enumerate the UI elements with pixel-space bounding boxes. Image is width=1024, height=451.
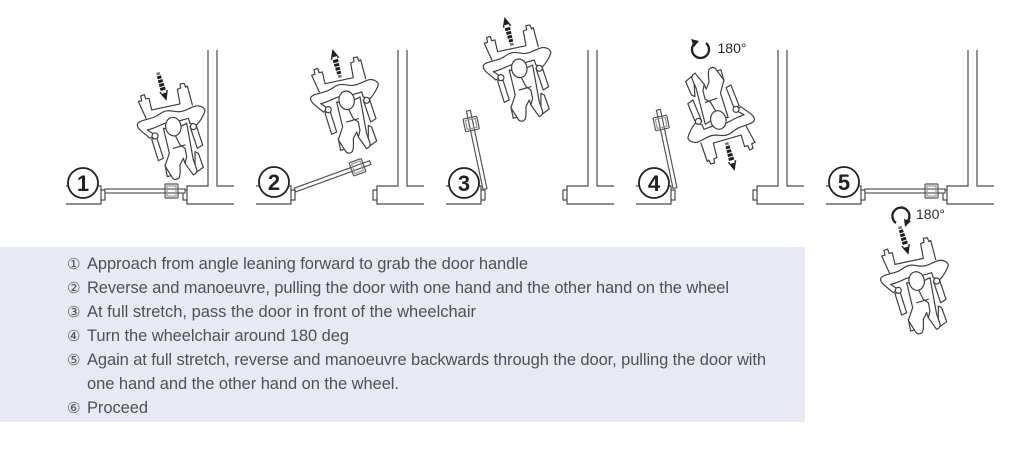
step 5 text [67, 351, 766, 393]
rotation label 4 [691, 39, 746, 58]
diagram 1: approach [66, 50, 234, 204]
rotation label 5 [892, 206, 945, 227]
step 6 text: Proceed [87, 399, 148, 417]
step 2 text: Reverse and manoeuvre, pulling the door with one hand and the other hand on the wheel [87, 279, 729, 297]
wheelchair user 3 [483, 25, 551, 121]
step 3 text: ③ [67, 303, 80, 321]
step 5 text: one hand and the other hand on the wheel. [87, 375, 399, 393]
number badge 5: 5 [838, 170, 850, 195]
instructions panel [0, 247, 805, 422]
number badge 2 [259, 167, 289, 197]
step 5 text: ⑤ [67, 351, 80, 369]
step 3 text: At full stretch, pass the door in front of the wheelchair [87, 303, 476, 321]
diagram 4: turn 180 degrees [636, 39, 804, 204]
number badge 3: 3 [458, 171, 470, 196]
arrow 2 [328, 48, 345, 79]
number badge 4: 4 [648, 171, 661, 196]
step 4 text: Turn the wheelchair around 180 deg [87, 327, 349, 345]
number badge 1 [68, 168, 98, 198]
diagram 3: pass door in front [446, 16, 614, 204]
rotation label 4: 180° [718, 40, 746, 56]
wheelchair user 4 [683, 65, 757, 165]
number badge 5 [829, 167, 859, 197]
step 1 text: ① [67, 255, 80, 273]
number badge 1: 1 [77, 171, 89, 196]
arrow 3 [500, 16, 517, 47]
number badge 2: 2 [268, 170, 280, 195]
step 6 text: ⑥ [67, 399, 80, 417]
arrow 4 [722, 141, 739, 172]
diagram 5: reverse through door [826, 50, 994, 334]
step 4 text: ④ [67, 327, 80, 345]
step 1 text: Approach from angle leaning forward to grab the door handle [87, 255, 528, 273]
number badge 4 [639, 168, 669, 198]
step 5 text: Again at full stretch, reverse and manoeuvre backwards through the door, pulling the door with [87, 351, 766, 369]
rotation label 5: 180° [916, 206, 945, 222]
wheelchair user 1 [137, 83, 205, 179]
step 2 text: ② [67, 279, 80, 297]
arrow 5 [896, 225, 913, 256]
wheelchair user 5 [881, 238, 948, 334]
number badge 3 [449, 168, 479, 198]
wheelchair user 2 [311, 57, 378, 153]
diagram 2: reverse and pull door [256, 48, 424, 204]
arrow 1 [154, 71, 171, 102]
